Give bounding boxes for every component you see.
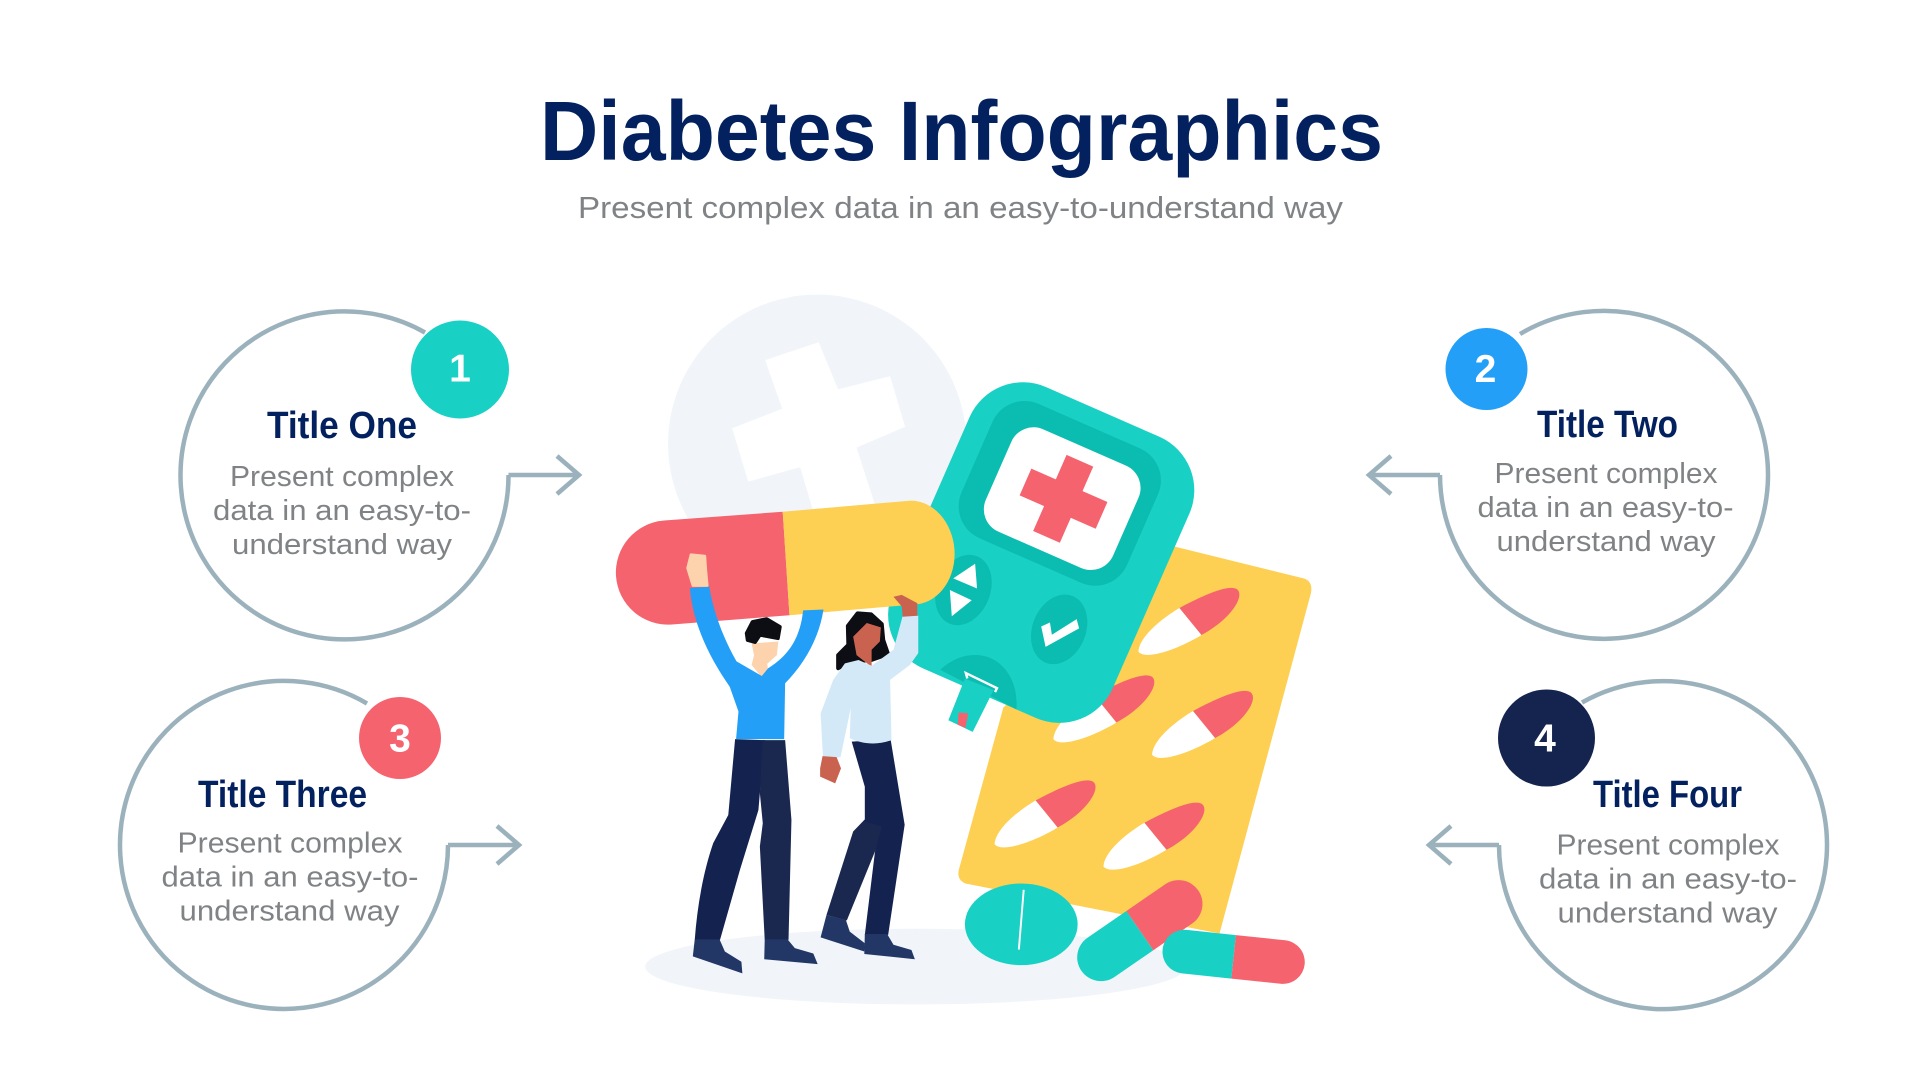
meter body with screen bbox=[870, 364, 1213, 741]
ring bbox=[120, 681, 448, 1009]
round tablet bbox=[965, 883, 1078, 965]
hair bbox=[838, 613, 888, 668]
arrow buttons bbox=[925, 546, 1002, 634]
body text: data in an easy-to- bbox=[1539, 864, 1797, 896]
arrow bbox=[1429, 826, 1499, 864]
heading: Title One bbox=[267, 405, 417, 447]
raised hand bbox=[893, 595, 917, 617]
number badge 4 bbox=[1498, 690, 1595, 786]
sweater bbox=[821, 616, 918, 759]
body text: understand way bbox=[180, 896, 400, 928]
heading: Title Two bbox=[1537, 404, 1678, 446]
panel: title one bbox=[181, 311, 579, 639]
lower hand bbox=[820, 756, 841, 783]
diagonal capsule bbox=[1068, 871, 1212, 990]
title: Diabetes Infographics bbox=[540, 84, 1383, 178]
body text: understand way bbox=[1496, 526, 1716, 558]
blister pill 2 bbox=[1043, 670, 1164, 749]
ring bbox=[1499, 681, 1827, 1009]
raised fist bbox=[687, 555, 707, 586]
check button bbox=[1021, 586, 1097, 673]
number badge 1: 1 bbox=[449, 348, 471, 390]
strip port bbox=[940, 655, 1017, 710]
panel: title three bbox=[120, 681, 519, 1009]
blister pill 4 bbox=[984, 775, 1106, 854]
number badge 2: 2 bbox=[1475, 348, 1496, 391]
blister pill 3 bbox=[1142, 686, 1263, 765]
face and neck bbox=[853, 623, 881, 667]
neck and face bbox=[752, 642, 778, 677]
shoes bbox=[821, 915, 915, 959]
body text: Present complex bbox=[1494, 458, 1718, 490]
shoes bbox=[693, 939, 818, 973]
hair bbox=[747, 619, 780, 642]
ring bbox=[181, 311, 509, 639]
body text: Present complex bbox=[1556, 830, 1780, 862]
number badge 2 bbox=[1446, 328, 1528, 410]
heading: Title Four bbox=[1593, 774, 1742, 816]
body text: data in an easy-to- bbox=[162, 862, 418, 894]
body text: Present complex bbox=[230, 461, 455, 493]
trousers bbox=[695, 739, 791, 940]
number badge 3 bbox=[359, 697, 441, 779]
number badge 1 bbox=[411, 320, 509, 418]
test strip bbox=[948, 673, 997, 732]
body text: Present complex bbox=[178, 828, 403, 860]
body text: data in an easy-to- bbox=[1478, 492, 1734, 524]
blister pack bbox=[958, 546, 1311, 934]
woman figure bbox=[820, 595, 918, 959]
body text: understand way bbox=[1558, 898, 1778, 930]
subtitle: Present complex data in an easy-to-understand way bbox=[578, 190, 1344, 225]
trousers bbox=[826, 739, 905, 935]
arrow bbox=[448, 826, 519, 864]
body text: understand way bbox=[232, 529, 453, 561]
heading: Title Three bbox=[198, 774, 367, 816]
sweater bbox=[690, 587, 824, 739]
blister pill 1 bbox=[1128, 583, 1249, 662]
arrow bbox=[1369, 456, 1440, 494]
ring bbox=[1440, 311, 1768, 639]
blister pill 5 bbox=[1093, 797, 1214, 877]
body text bbox=[1478, 458, 1734, 558]
arrow bbox=[508, 456, 579, 494]
number badge 3: 3 bbox=[389, 718, 411, 760]
flat capsule bbox=[1160, 928, 1307, 986]
body text: data in an easy-to- bbox=[213, 495, 471, 527]
body text bbox=[162, 828, 418, 928]
man figure bbox=[687, 555, 824, 973]
ground shadow bbox=[645, 929, 1186, 1004]
big capsule bbox=[616, 501, 955, 625]
background circle with cross bbox=[668, 295, 966, 593]
body text bbox=[213, 461, 471, 561]
body text bbox=[1539, 830, 1797, 930]
central illustration bbox=[616, 295, 1311, 1004]
number badge 4: 4 bbox=[1534, 718, 1556, 760]
glucose meter bbox=[870, 364, 1213, 741]
panel: title four bbox=[1429, 681, 1827, 1009]
panel: title two bbox=[1369, 311, 1768, 639]
